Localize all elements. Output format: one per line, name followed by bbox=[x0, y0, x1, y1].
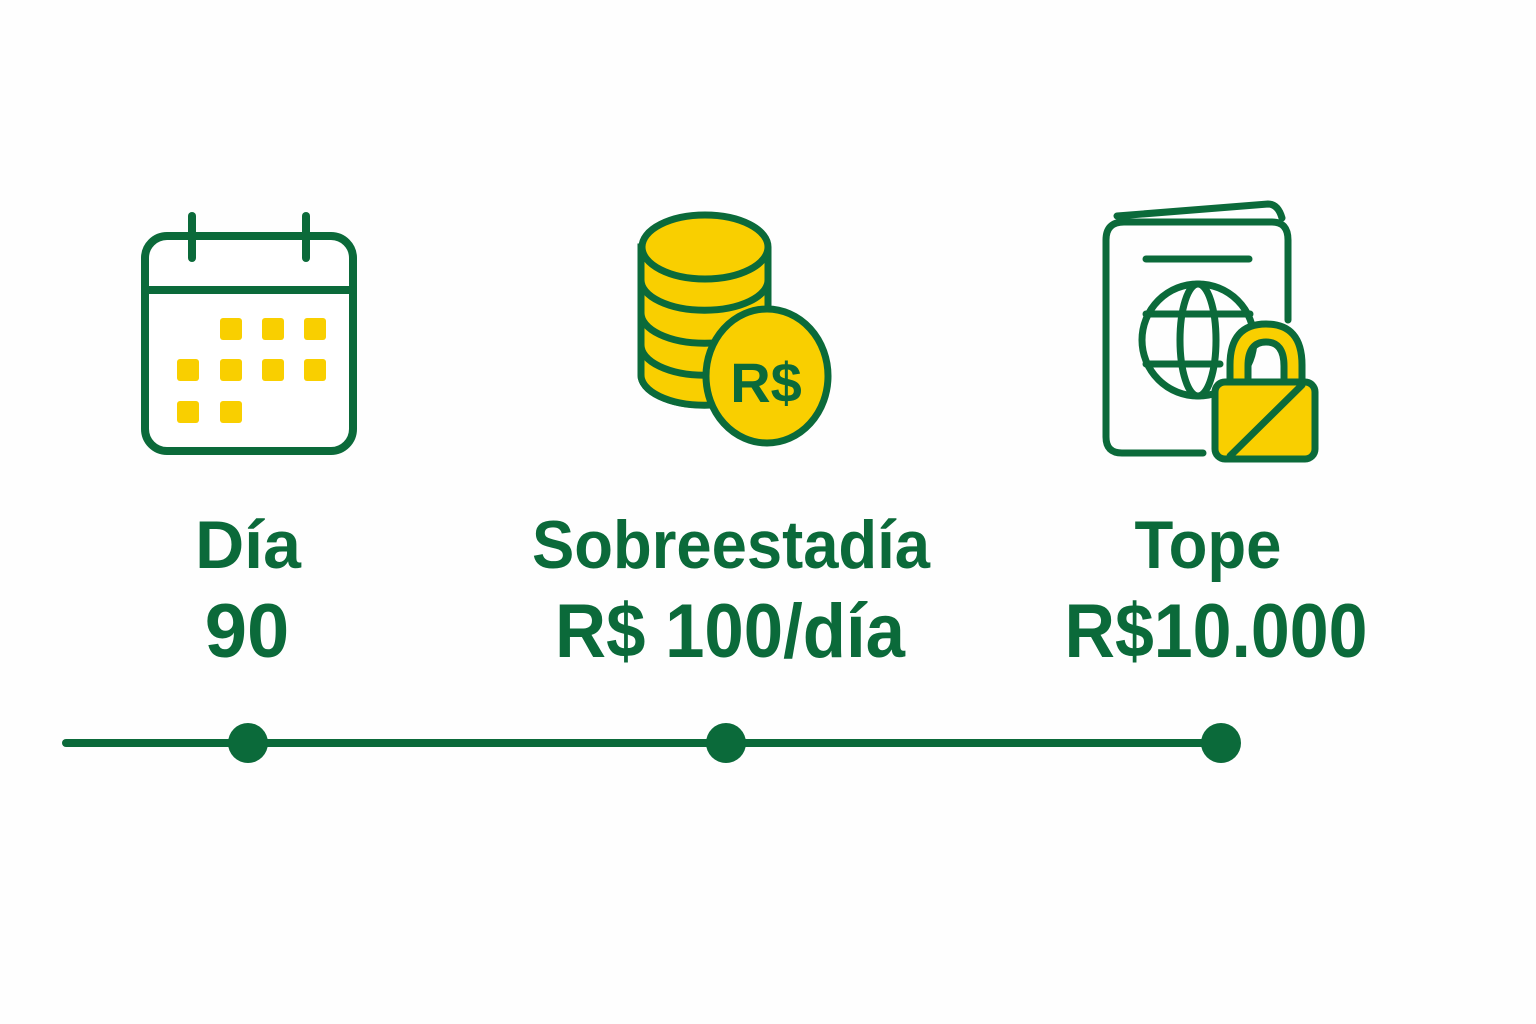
icon: calendar bbox=[145, 216, 353, 451]
label: Día 90: Día bbox=[195, 507, 302, 583]
icon: coins bbox=[641, 215, 828, 443]
label: Sobreestadía: Sobreestadía bbox=[532, 507, 931, 583]
timeline bbox=[66, 723, 1241, 763]
label: Día 90: 90 bbox=[205, 589, 289, 674]
icon: coins: R$ bbox=[730, 351, 802, 414]
label: Tope bbox=[1064, 507, 1368, 674]
label: Tope: R$10.000 bbox=[1064, 589, 1368, 674]
icon: passport with lock bbox=[1106, 204, 1315, 459]
label: Tope: Tope bbox=[1134, 507, 1282, 583]
label: Sobreestadía: R$ 100/día bbox=[555, 589, 906, 674]
label: Sobreestadía bbox=[532, 507, 931, 674]
label: Día 90 bbox=[195, 507, 302, 674]
